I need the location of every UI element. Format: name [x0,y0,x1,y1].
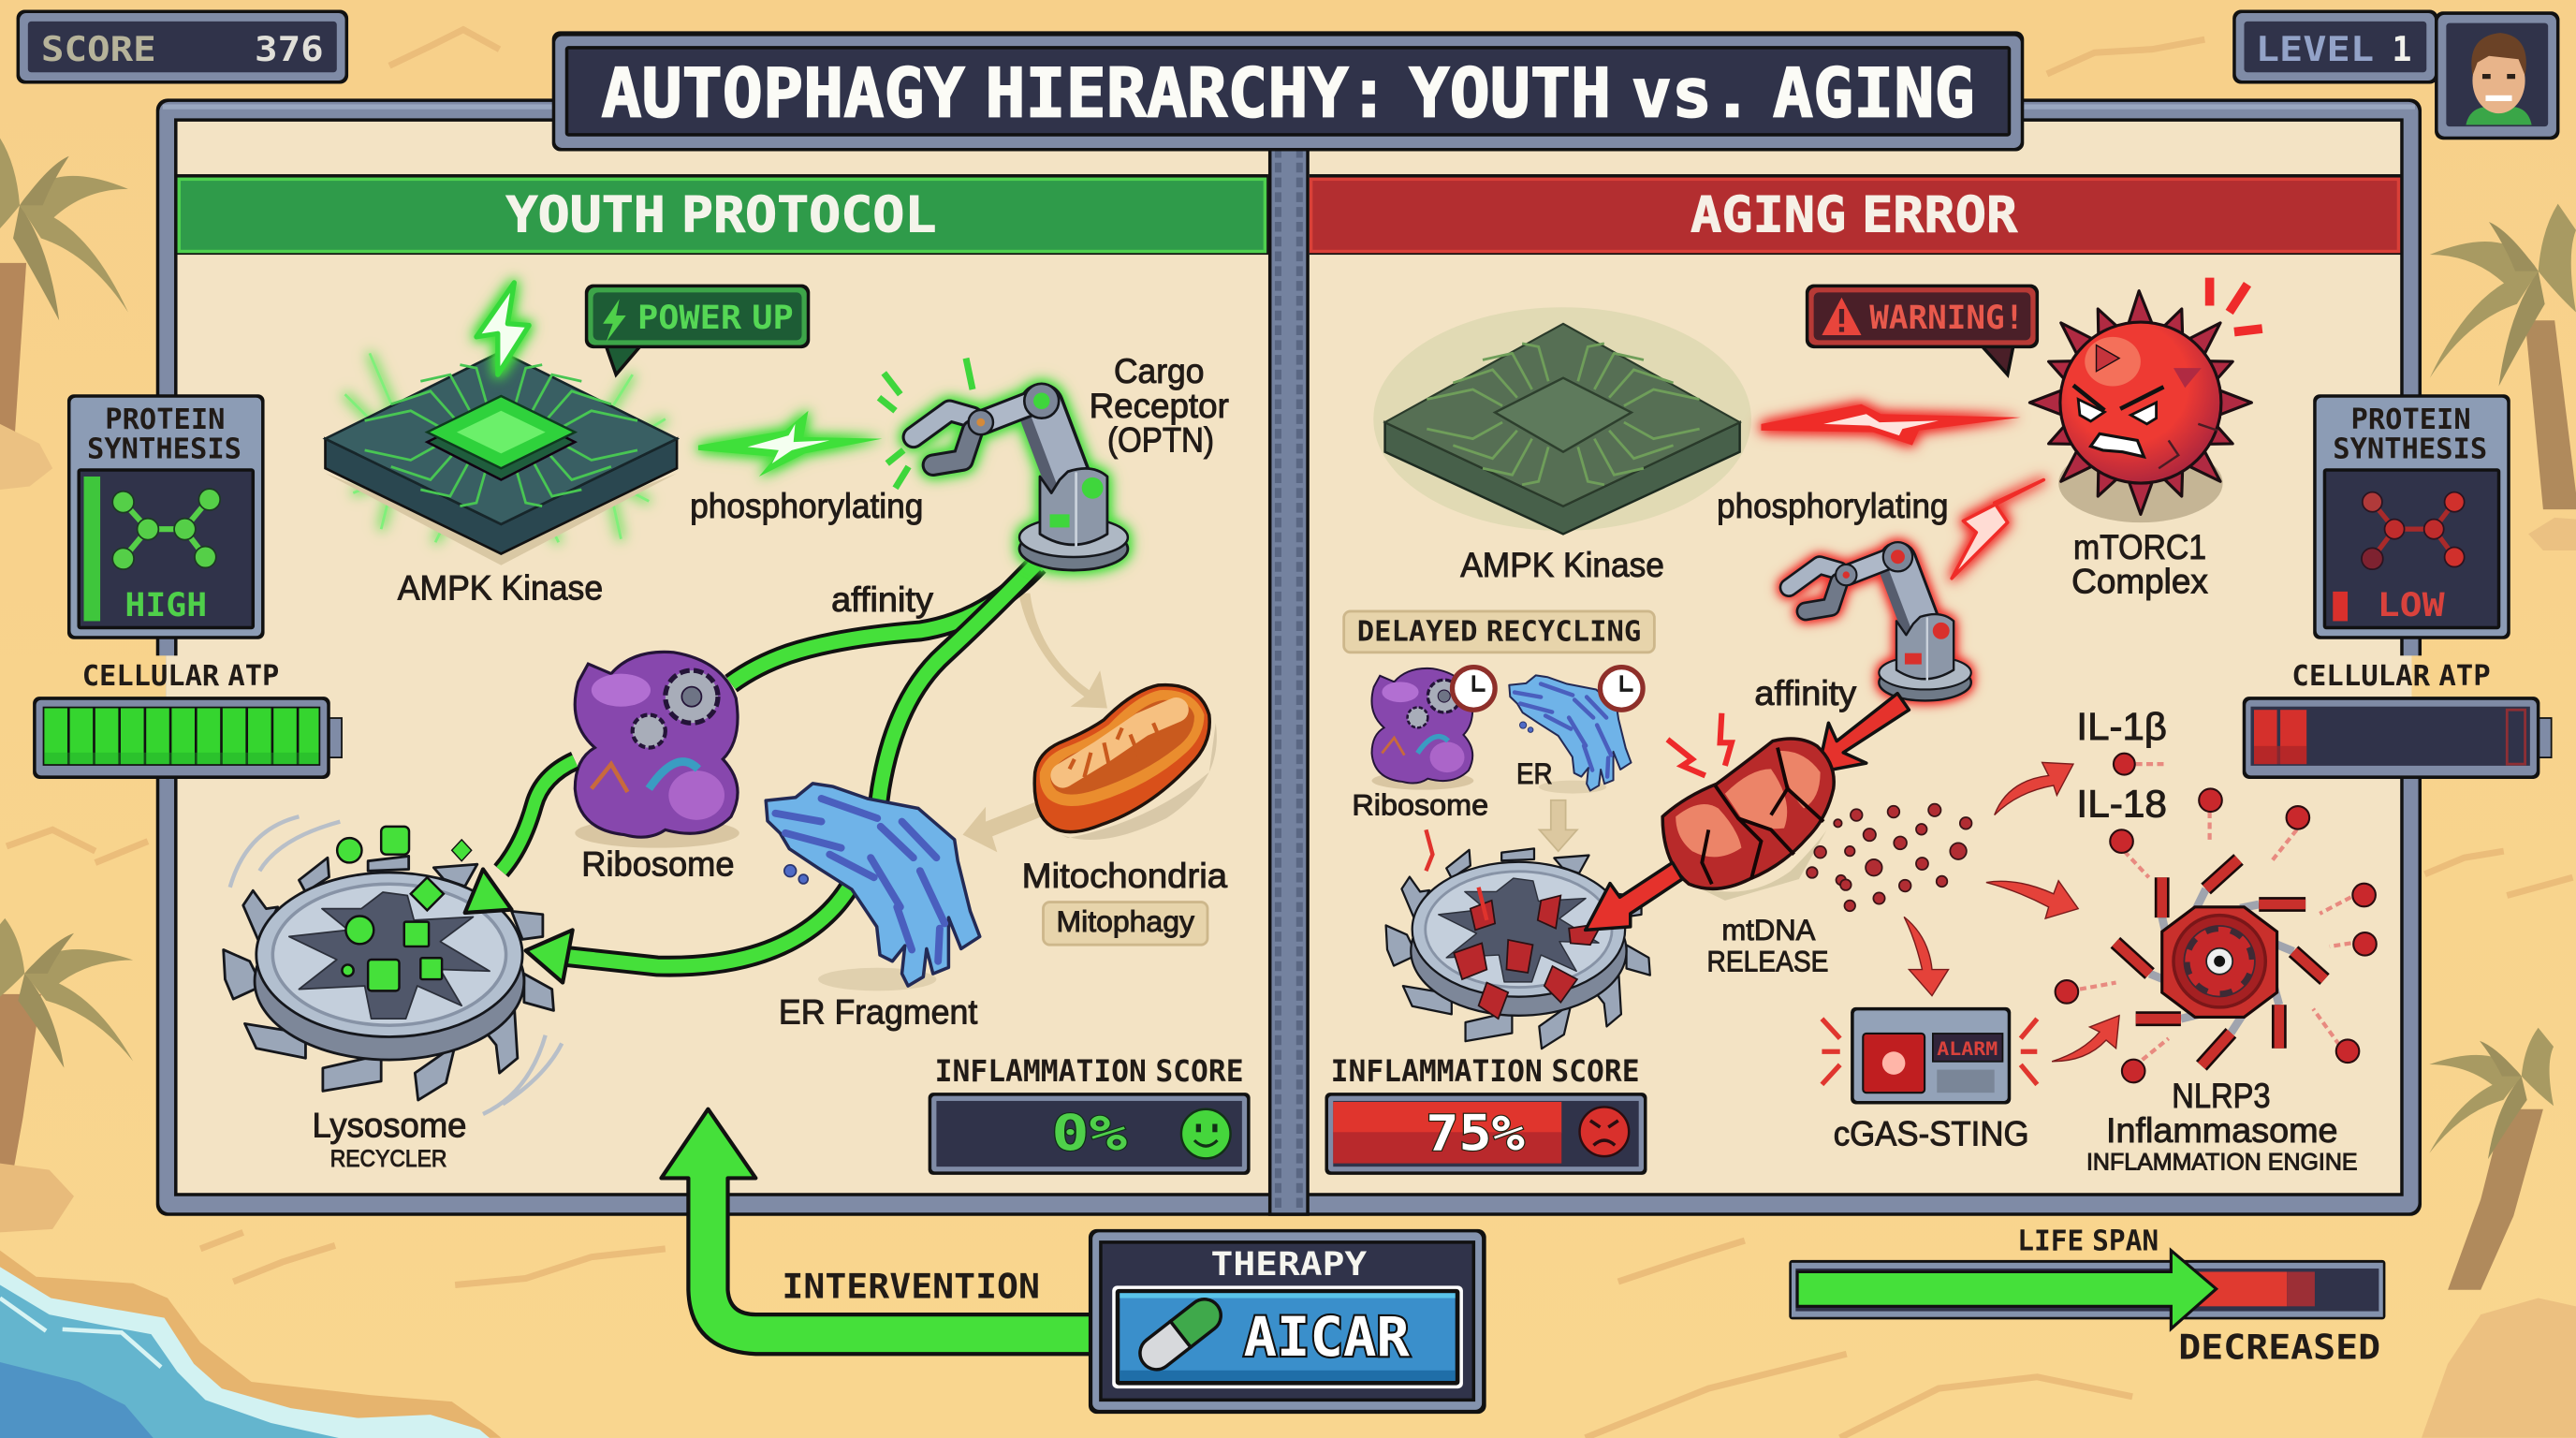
arrow: tan to ER [962,802,1042,852]
label: ribosome right: Ribosome [1352,788,1488,822]
label: lysosome: Lysosome [312,1107,466,1145]
NLRP3 inflammasome [2115,859,2324,1065]
label: NLRP3 inflammasome: INFLAMMATION ENGINE [2086,1151,2358,1176]
icon: warning triangle [1822,298,1862,335]
arrow: mTORC1 bolt to receptor [1952,480,2043,579]
red debris [1454,896,1602,1019]
cGAS-STING alarm [1822,1007,2037,1104]
label: mtDNA release: RELEASE [1707,944,1828,977]
mtDNA particles [1807,804,1971,911]
label: mitochondria [1022,857,1228,945]
lysosome clogged [1386,829,1650,1049]
ribosome healthy [575,652,739,848]
damaged mitochondria [1662,739,1834,901]
arrowhead: lysosome entry [526,930,573,983]
panel header: aging error [1310,174,2402,255]
inflammation score aging: INFLAMMATION SCORE [1331,1055,1640,1089]
palm: lower right [2422,1028,2576,1438]
centre divider [1268,148,1310,1216]
icon: pill [1134,1293,1227,1376]
cytokine particles [2056,754,2377,1082]
label: mTORC1 complex: mTORC1 [2073,528,2206,566]
label: intervention: INTERVENTION [782,1267,1040,1307]
score box: 376 [255,29,324,69]
ATP battery full [33,697,342,779]
label: affinity left: affinity [831,580,933,619]
label: AMPK kinase left: AMPK Kinase [398,569,603,608]
therapy panel [1089,1229,1486,1414]
protein synthesis gauge: low [2313,394,2510,639]
callout: power up: POWER UP [637,299,794,337]
inflammation score youth: 0% [1051,1106,1127,1163]
icon: angry face [1580,1107,1629,1156]
arrow: damaged mitochondria to lysosome [1586,862,1682,930]
label: mitochondria: Mitochondria [1022,857,1228,895]
inflammation score aging [1325,1055,1647,1175]
label: IL-18: IL-18 [2076,782,2167,825]
icon: clock [1453,668,1495,710]
alert marks [2210,278,2262,332]
callout: warning: WARNING! [1869,299,2024,337]
spikes [2029,291,2251,514]
protein gauge heading: SYNTHESIS [87,433,242,466]
label: cargo receptor: Cargo [1114,352,1204,390]
palm: top right [2430,204,2576,550]
protein gauge heading: SYNTHESIS [2333,433,2487,466]
arrowhead: ribosome path [465,869,512,913]
label: NLRP3 inflammasome: Inflammasome [2106,1111,2338,1150]
arrow: red inhibition bolt [1761,404,2021,446]
therapy panel: AICAR [1244,1305,1410,1369]
level box [2232,10,2438,84]
callout: power up [585,285,810,374]
shore, water and foam [0,1251,501,1438]
inflammation score youth [929,1055,1251,1175]
title banner: AUTOPHAGY HIERARCHY: YOUTH vs. AGING [601,54,1975,133]
label: ER fragment: ER Fragment [779,992,977,1031]
green sparks near claw [879,359,973,488]
arrow: receptor to damaged mitochondria [1818,694,1909,772]
protein synthesis gauge: low: LOW [2378,586,2446,624]
protein gauge heading [87,404,242,466]
aging chip: AMPK kinase [1373,307,1751,534]
chip glow sparks [345,353,666,542]
protein gauge heading [2333,404,2487,466]
grey joints [2150,889,2293,1033]
tag: mitophagy [1043,902,1208,945]
cGAS-STING alarm: ALARM [1937,1038,1998,1060]
panel header: youth protocol [176,174,1268,255]
arrow: tan to mitochondria [1018,594,1107,708]
ER delayed [1509,668,1643,794]
pathway: receptor to ribosome [731,565,1038,683]
title banner [552,31,2024,151]
mTORC1 spiked ball [2029,291,2251,522]
icon: bolt [603,299,626,342]
protein gauge heading: PROTEIN [105,404,225,436]
label: ER: ER [1516,756,1553,790]
label: lysosome [312,1107,466,1172]
protein gauge heading: PROTEIN [2351,404,2471,436]
pathway: receptor to lysosome via ER [526,565,1035,983]
frame gaps behind ATP labels [154,655,166,698]
life span bar [1789,1225,2385,1367]
label: affinity right: affinity [1754,674,1857,712]
icon: protein molecule healthy [112,489,220,569]
life span bar: DECREASED [2178,1327,2380,1367]
robot arm: cargo receptor [914,384,1128,570]
label: AMPK kinase right: AMPK Kinase [1460,546,1664,584]
ribosome delayed [1371,668,1495,790]
callout: warning [1806,285,2039,374]
robot arm: stalled receptor [1789,542,1971,700]
label: cargo receptor: (OPTN) [1107,421,1214,460]
level box: LEVEL [2256,29,2374,69]
pathway: ribosome to lysosome [465,761,575,913]
swoosh marks [230,816,562,1114]
main frame [154,98,2423,1216]
green cargo blocks [337,827,472,990]
life span bar: LIFE SPAN [2017,1225,2159,1258]
inflammation score youth: INFLAMMATION SCORE [935,1055,1244,1089]
score box: SCORE [41,29,156,69]
player avatar [2435,11,2559,139]
palm: top left [0,138,128,490]
icon: protein molecule damaged [2362,492,2465,569]
arrow: to cytokines [1995,762,2073,815]
label: mtDNA release [1707,913,1828,977]
icon: clock [1600,668,1643,710]
rods [2115,859,2324,1065]
label: phosphorylating left: phosphorylating [690,487,923,525]
tag: mitophagy: Mitophagy [1057,904,1194,938]
label: cGAS-STING: cGAS-STING [1834,1114,2029,1152]
protein synthesis gauge: high [67,394,265,639]
arrow: tan delayed flow [1540,800,1577,851]
label: cargo receptor: Receptor [1090,387,1229,425]
arrow: to inflammasome [1986,881,2078,918]
tag: delayed recycling: DELAYED RECYCLING [1357,616,1641,649]
cellular ATP label left: CELLULAR ATP [82,660,279,693]
ER fragment [766,784,980,990]
label: cargo receptor [1090,352,1229,460]
icon: happy face [1181,1109,1231,1158]
inflammation score aging: 75% [1426,1106,1525,1163]
arrow: to cGAS-STING [1904,917,1949,996]
arrow: green phosphorylation bolt [698,411,882,477]
label: mTORC1 complex [2071,528,2208,601]
level box: 1 [2392,29,2411,69]
arrow: therapy intervention [661,1109,1094,1354]
label: mtDNA release: mtDNA [1721,913,1815,946]
label: ribosome: Ribosome [581,844,735,883]
panel header: youth protocol: YOUTH PROTOCOL [506,186,936,243]
panel header: aging error: AGING ERROR [1690,186,2018,243]
protein synthesis gauge: high: HIGH [124,586,207,624]
palm: lower left [0,918,133,1232]
therapy panel: THERAPY [1211,1245,1367,1284]
red sparks near damaged mitochondria [1667,713,1732,775]
arrow: alarm to inflammasome [2052,1016,2119,1062]
label: mTORC1 complex: Complex [2071,563,2208,601]
cellular ATP label right: CELLULAR ATP [2291,660,2491,693]
label: NLRP3 inflammasome: NLRP3 [2172,1077,2271,1115]
label: NLRP3 inflammasome [2086,1077,2358,1176]
angry face [2073,386,2163,457]
label: IL-1 beta: IL-1β [2076,705,2167,748]
icon: power bolt [476,283,529,374]
mitochondria healthy [1034,685,1217,840]
score box [17,10,348,84]
ATP battery low [2243,697,2552,779]
label: lysosome: RECYCLER [330,1147,446,1172]
label: phosphorylating right: phosphorylating [1717,487,1949,525]
youth chip: AMPK kinase [326,352,677,565]
lysosome healthy [224,816,562,1114]
